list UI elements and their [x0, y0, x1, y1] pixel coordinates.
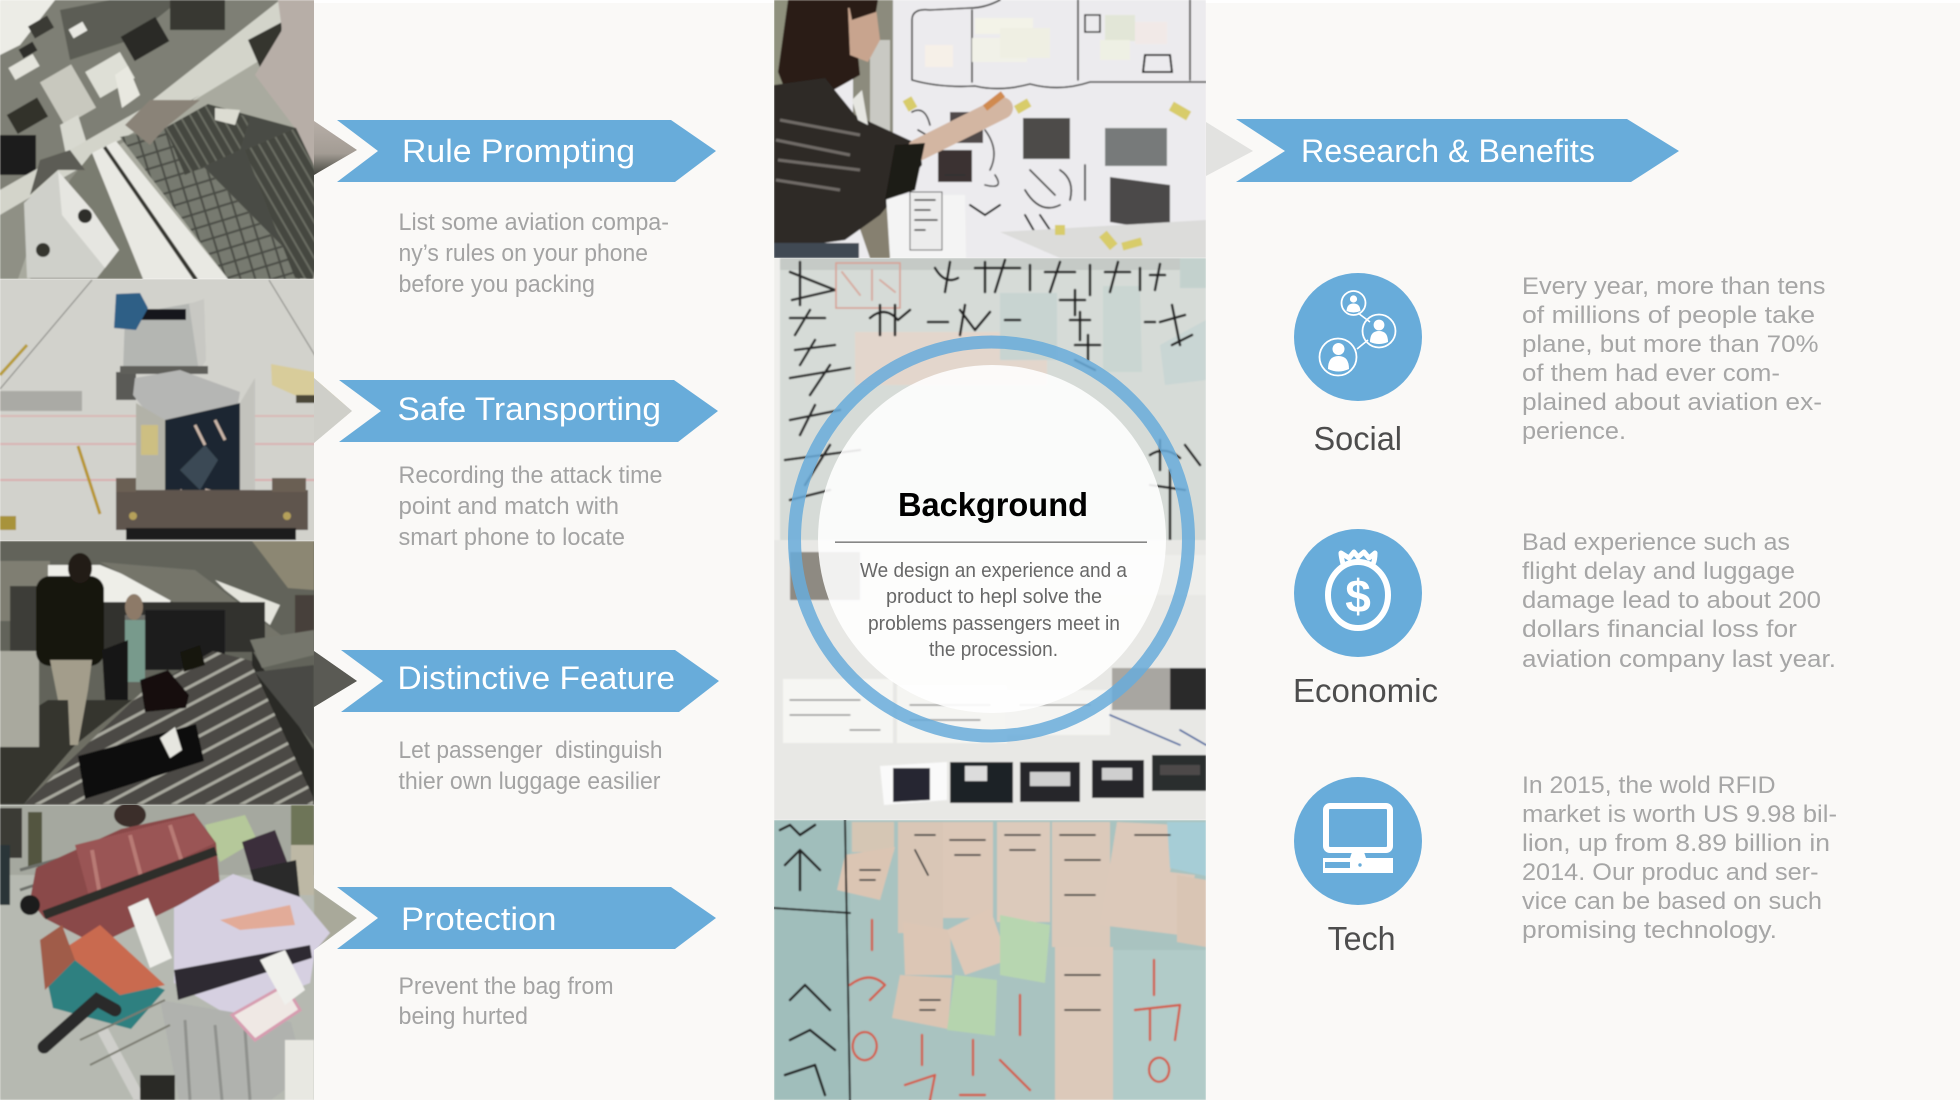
text: Rule Prompting description	[398, 209, 669, 298]
banner: Research & Benefits: Research & Benefits	[1301, 133, 1595, 169]
photo: stacked luggage on trolley	[0, 803, 360, 1100]
text: Tech description: promising technology.	[1522, 917, 1777, 944]
text: Social description: perience.	[1522, 418, 1626, 445]
photo arrow tip	[314, 378, 347, 417]
label: Tech: Tech	[1328, 920, 1396, 957]
callout text: product to hepl solve the	[886, 586, 1102, 608]
text: Economic description: dollars financial loss for	[1522, 616, 1797, 643]
icon: money bag: $	[1345, 570, 1371, 622]
label: Social: Social	[1314, 420, 1402, 457]
banner: Rule Prompting	[337, 120, 716, 182]
callout white disc	[818, 365, 1166, 713]
text: Safe Transporting description: smart phone to locate	[398, 524, 625, 551]
text: Distinctive Feature description: thier own luggage easilier	[398, 768, 661, 795]
text: Tech description: market is worth US 9.98 bil-	[1522, 801, 1837, 828]
text: Economic description: flight delay and luggage	[1522, 558, 1795, 585]
text: Tech description: 2014. Our produc and ser-	[1522, 859, 1818, 886]
callout ring	[794, 342, 1188, 736]
photo: post-it notes board	[774, 820, 1206, 1100]
icon: computer	[1294, 777, 1422, 905]
text: Safe Transporting description: point and match with	[398, 493, 619, 520]
text: Social description	[1522, 273, 1826, 445]
text: Protection description: Prevent the bag from	[398, 973, 614, 1000]
photo: research wall with notes	[774, 258, 1206, 820]
text: Tech description: In 2015, the wold RFID	[1522, 772, 1776, 799]
banner: Research & Benefits	[1236, 119, 1679, 182]
text: Tech description: lion, up from 8.89 billion in	[1522, 830, 1830, 857]
text: Rule Prompting description: before you packing	[398, 271, 595, 298]
text: Safe Transporting description: Recording the attack time	[398, 462, 662, 489]
text: Economic description: aviation company last year.	[1522, 646, 1836, 673]
text: Social description: plained about aviation ex-	[1522, 389, 1822, 416]
text: Tech description: vice can be based on such	[1522, 888, 1822, 915]
banner: Protection: Protection	[401, 901, 556, 937]
text: Economic description	[1522, 529, 1836, 673]
text: Distinctive Feature description	[398, 737, 662, 795]
label: Economic: Economic	[1293, 672, 1438, 709]
callout heading: Background	[898, 486, 1088, 523]
photo arrow tip	[314, 651, 357, 707]
text: Safe Transporting description	[398, 462, 662, 551]
callout text: problems passengers meet in	[868, 613, 1120, 635]
text: Tech description	[1522, 772, 1837, 944]
text: Social description: plane, but more than 70%	[1522, 331, 1818, 358]
banner: Distinctive Feature: Distinctive Feature	[398, 660, 675, 696]
photo arrow tip	[314, 121, 357, 175]
text: Distinctive Feature description: Let passenger distinguish	[398, 737, 662, 764]
callout divider	[835, 542, 1147, 543]
text: Protection description	[398, 973, 614, 1030]
banner: Rule Prompting: Rule Prompting	[402, 133, 635, 169]
text: Social description: Every year, more than tens	[1522, 273, 1826, 300]
banner: Safe Transporting	[339, 380, 718, 442]
banner: Protection	[337, 887, 716, 949]
text: Economic description: damage lead to about 200	[1522, 587, 1821, 614]
text: Rule Prompting description: ny’s rules on your phone	[398, 240, 648, 267]
photo: baggage carousel	[0, 541, 360, 805]
photo: designer at whiteboard	[774, 0, 1206, 258]
callout text: the procession.	[929, 639, 1058, 661]
photo: suitcases on conveyor	[0, 0, 360, 279]
text: Social description: of millions of people take	[1522, 302, 1815, 329]
text: Protection description: being hurted	[398, 1003, 528, 1030]
icon: social network	[1294, 273, 1422, 401]
background circle callout	[794, 342, 1188, 736]
photo: cargo containers on apron	[0, 279, 360, 541]
banner: Distinctive Feature	[341, 650, 719, 712]
callout text	[860, 560, 1128, 661]
text: Economic description: Bad experience such as	[1522, 529, 1790, 556]
callout text: We design an experience and a	[860, 560, 1128, 582]
icon: money bag	[1294, 529, 1422, 657]
text: Rule Prompting description: List some aviation compa-	[398, 209, 669, 236]
arrow tip: research panel	[1206, 122, 1253, 176]
text: Social description: of them had ever com-	[1522, 360, 1780, 387]
banner: Safe Transporting: Safe Transporting	[398, 391, 661, 427]
